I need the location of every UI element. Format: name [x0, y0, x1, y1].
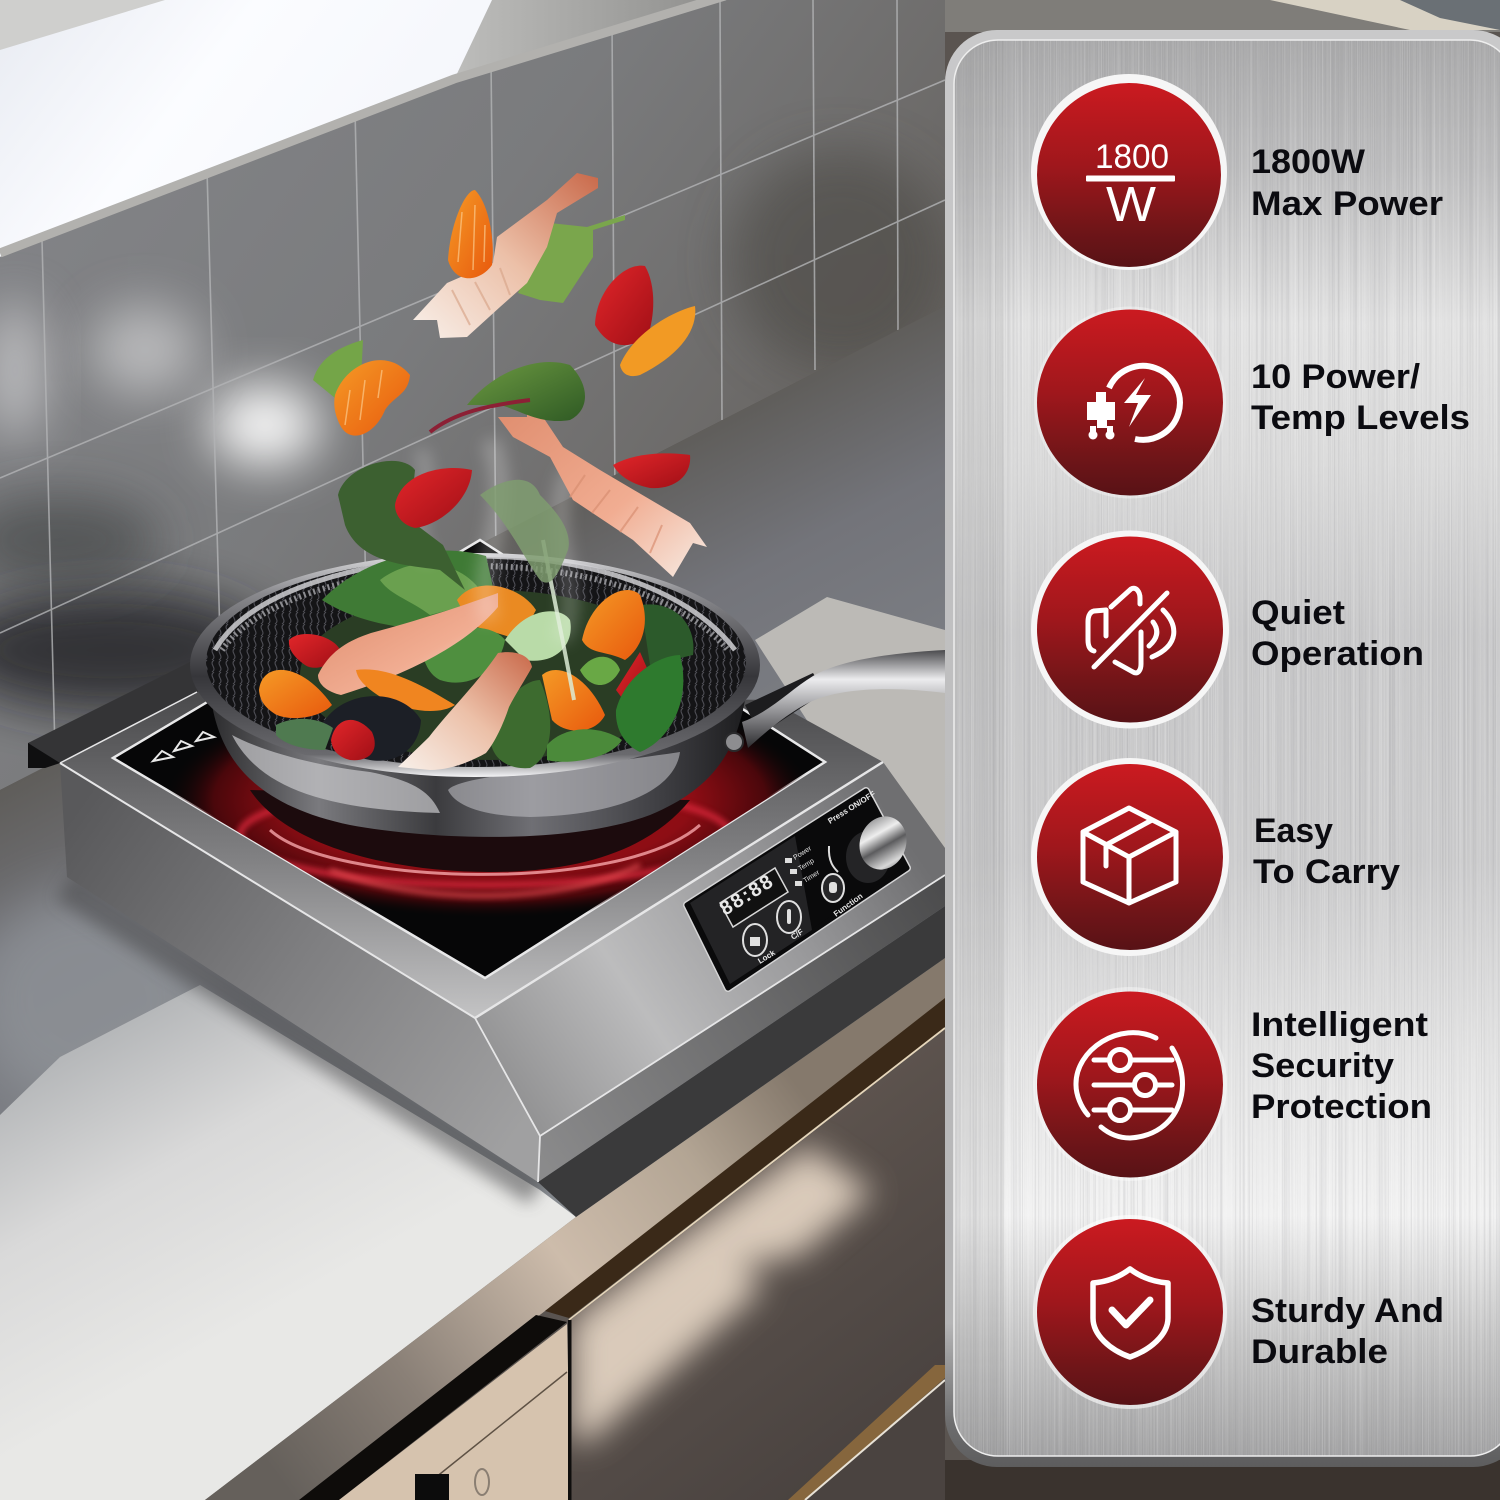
- panel frame: [945, 30, 1500, 1467]
- knob: [846, 810, 914, 883]
- grey marble counter: [0, 306, 945, 1217]
- chard leaf: [430, 362, 585, 432]
- indicator lights: Temp: [797, 858, 816, 873]
- pan interior: [206, 557, 746, 767]
- rim: [190, 553, 760, 777]
- temperature button: C/F: [789, 927, 805, 942]
- label: [1253, 812, 1400, 891]
- label: Operation: [1251, 635, 1424, 673]
- icon: shield check: [1033, 1215, 1227, 1409]
- flying shrimp bottom: [498, 393, 707, 577]
- label: Intelligent: [1251, 1006, 1428, 1044]
- tomato slice: [395, 468, 472, 528]
- label: Quiet: [1251, 594, 1345, 632]
- front right face: [475, 762, 945, 1136]
- lettuce leaf: [518, 215, 625, 303]
- strip below panel: [945, 1460, 1500, 1500]
- warning triangles: [153, 732, 214, 761]
- icon: sliders: [1033, 987, 1227, 1181]
- label: Protection: [1251, 1088, 1432, 1126]
- label: Durable: [1251, 1333, 1388, 1371]
- icon: muted speaker: [1031, 530, 1229, 728]
- counter edge: [205, 958, 945, 1500]
- tiled backsplash: [0, 0, 950, 790]
- lower drawer: [339, 1320, 572, 1500]
- wall top trim: [0, 0, 725, 253]
- range hood: [454, 0, 725, 80]
- frying pan: [190, 540, 945, 872]
- flying food: [313, 173, 707, 640]
- strip above panel: [945, 0, 1500, 32]
- glass cooktop: [113, 540, 825, 978]
- lock button: [743, 924, 777, 966]
- flying shrimp top: [413, 173, 598, 338]
- left face: [60, 763, 540, 1182]
- reflected light patch on counter: [755, 597, 945, 850]
- label: [1251, 143, 1443, 223]
- label: [1251, 358, 1470, 437]
- shadow under cooker: [538, 906, 945, 1217]
- brown trim strip: [545, 998, 945, 1318]
- orange wedge top: [448, 190, 493, 278]
- orange with lettuce: [313, 340, 410, 436]
- icon: plug and bolt: [1034, 306, 1226, 498]
- function button: Function: [832, 891, 865, 919]
- panel: features: [945, 30, 1500, 1467]
- orange slice: [620, 306, 695, 376]
- lower strip: [538, 875, 945, 1182]
- steam: [418, 440, 570, 640]
- panel brushed surface: [954, 40, 1500, 1456]
- feature: sturdy and durable: [1033, 1215, 1444, 1409]
- function button: [822, 874, 865, 919]
- feature: easy to carry: [1031, 758, 1400, 956]
- label: 1800W: [1251, 143, 1366, 181]
- feature: intelligent security protection: [1033, 987, 1432, 1181]
- label: [1251, 1006, 1432, 1126]
- pan body: [212, 700, 745, 837]
- arugula leaf: [480, 480, 569, 583]
- spinach leaf: [338, 461, 465, 590]
- indicator lights: [785, 845, 822, 886]
- icon: box: [1031, 758, 1229, 956]
- soft shadow on counter: [65, 885, 538, 1190]
- label: 10 Power/: [1251, 358, 1421, 396]
- label: Security: [1251, 1047, 1394, 1085]
- digital display: 88:88: [716, 871, 777, 920]
- stainless cabinet: [570, 1128, 945, 1500]
- indicator lights: Timer: [802, 869, 822, 885]
- white marble counter front: [0, 985, 576, 1500]
- indicator lights: Power: [792, 845, 813, 862]
- induction cooker: [28, 540, 945, 1217]
- icon: 1800 W: [1031, 74, 1227, 270]
- label: [1251, 1292, 1444, 1371]
- temperature button: [777, 901, 805, 942]
- label: Sturdy And: [1251, 1292, 1444, 1330]
- red tomato: [595, 266, 653, 345]
- icon: 1800 W: 1800: [1095, 138, 1169, 176]
- icon: 1800 W: W: [1106, 178, 1157, 232]
- ceiling light area: [0, 0, 495, 257]
- pan base: [250, 790, 690, 872]
- black trim: [299, 1315, 567, 1500]
- pan handle: [742, 650, 945, 748]
- feature: quiet operation: [1031, 530, 1424, 728]
- rivet: [725, 733, 743, 751]
- label: Easy: [1254, 812, 1333, 850]
- label: Max Power: [1251, 185, 1443, 223]
- red glow: [168, 735, 806, 912]
- back plate: [28, 657, 240, 768]
- flying tomato right: [613, 453, 690, 488]
- label: Temp Levels: [1251, 399, 1470, 437]
- control panel: [687, 789, 914, 988]
- label: To Carry: [1253, 853, 1400, 891]
- lock button: Lock: [756, 948, 777, 966]
- food in pan: [259, 540, 693, 770]
- top frame: [60, 692, 883, 1018]
- feature: 1800W max power: [1031, 74, 1443, 270]
- label: [1251, 594, 1424, 673]
- power label: Press ON/OFF: [826, 789, 877, 826]
- feature: power levels: [1034, 306, 1470, 498]
